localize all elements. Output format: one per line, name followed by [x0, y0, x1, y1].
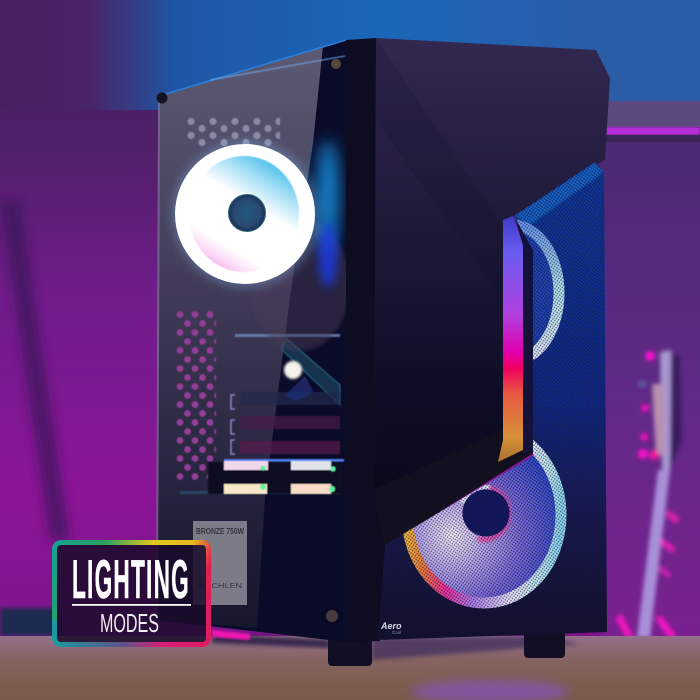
side perforated vent	[176, 310, 216, 482]
upper front fan	[516, 220, 564, 360]
glowing RGB fan	[172, 140, 320, 288]
infographic scene: LIGHTING	[72, 548, 190, 610]
mesh front panel	[370, 160, 610, 642]
motherboard and internal lines	[231, 334, 340, 454]
panel crease	[376, 38, 503, 300]
top perforated vent	[186, 118, 280, 146]
guitar in background	[615, 350, 682, 638]
brand logo	[380, 621, 402, 635]
badge subheading: MODES	[100, 608, 159, 638]
frame right of strip	[514, 214, 535, 452]
rear fan reflection	[266, 132, 346, 352]
glass screws	[156, 59, 341, 622]
power supply label: MACHLEN	[198, 583, 242, 590]
case feet	[328, 630, 565, 666]
drive bays	[208, 459, 344, 494]
case front spine	[346, 38, 386, 642]
LED light strip	[498, 216, 523, 462]
badge: Lighting Modes	[54, 542, 208, 644]
glass side panel	[156, 40, 350, 642]
front top panel	[374, 38, 610, 492]
power supply label: BRONZE 750W	[196, 527, 244, 536]
power supply label	[193, 521, 247, 605]
lower front fan	[406, 427, 562, 603]
brand logo: Aero	[380, 621, 402, 631]
PSU shroud shelf	[180, 491, 340, 494]
brand logo: Cool	[392, 630, 401, 635]
table top	[0, 630, 700, 700]
mesh texture	[370, 160, 610, 642]
lower frame under solid panel	[374, 430, 535, 546]
